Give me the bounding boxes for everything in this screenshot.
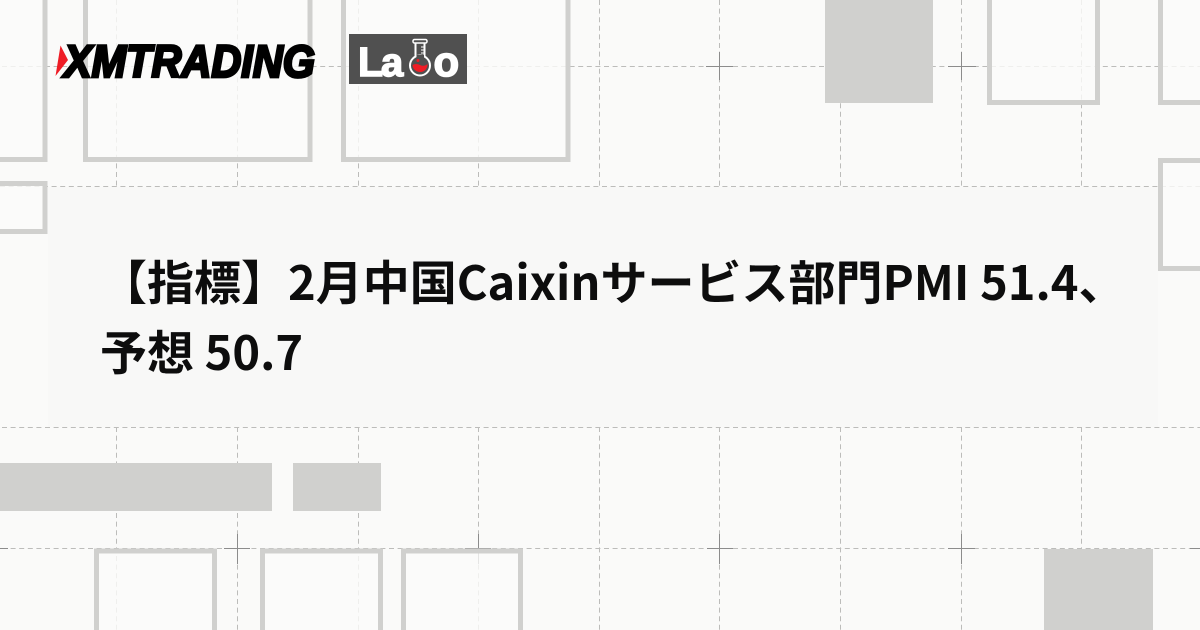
logo: Lab: a xyxy=(381,41,404,84)
logo: XMTRADING xyxy=(56,36,316,85)
panel: title background xyxy=(48,187,1158,427)
heading: title text xyxy=(100,245,1126,384)
heading: title text: 【指標】2月中国Caixinサービス部門PMI 51.4、 xyxy=(100,245,1126,314)
heading: title text: 予想 50.7 xyxy=(100,315,303,384)
icon: flask xyxy=(410,40,430,76)
icon: red arrow xyxy=(56,46,68,76)
wordmark letters: L xyxy=(358,39,383,84)
logo: Lab xyxy=(349,34,467,84)
logo: Lab: o xyxy=(434,38,459,84)
